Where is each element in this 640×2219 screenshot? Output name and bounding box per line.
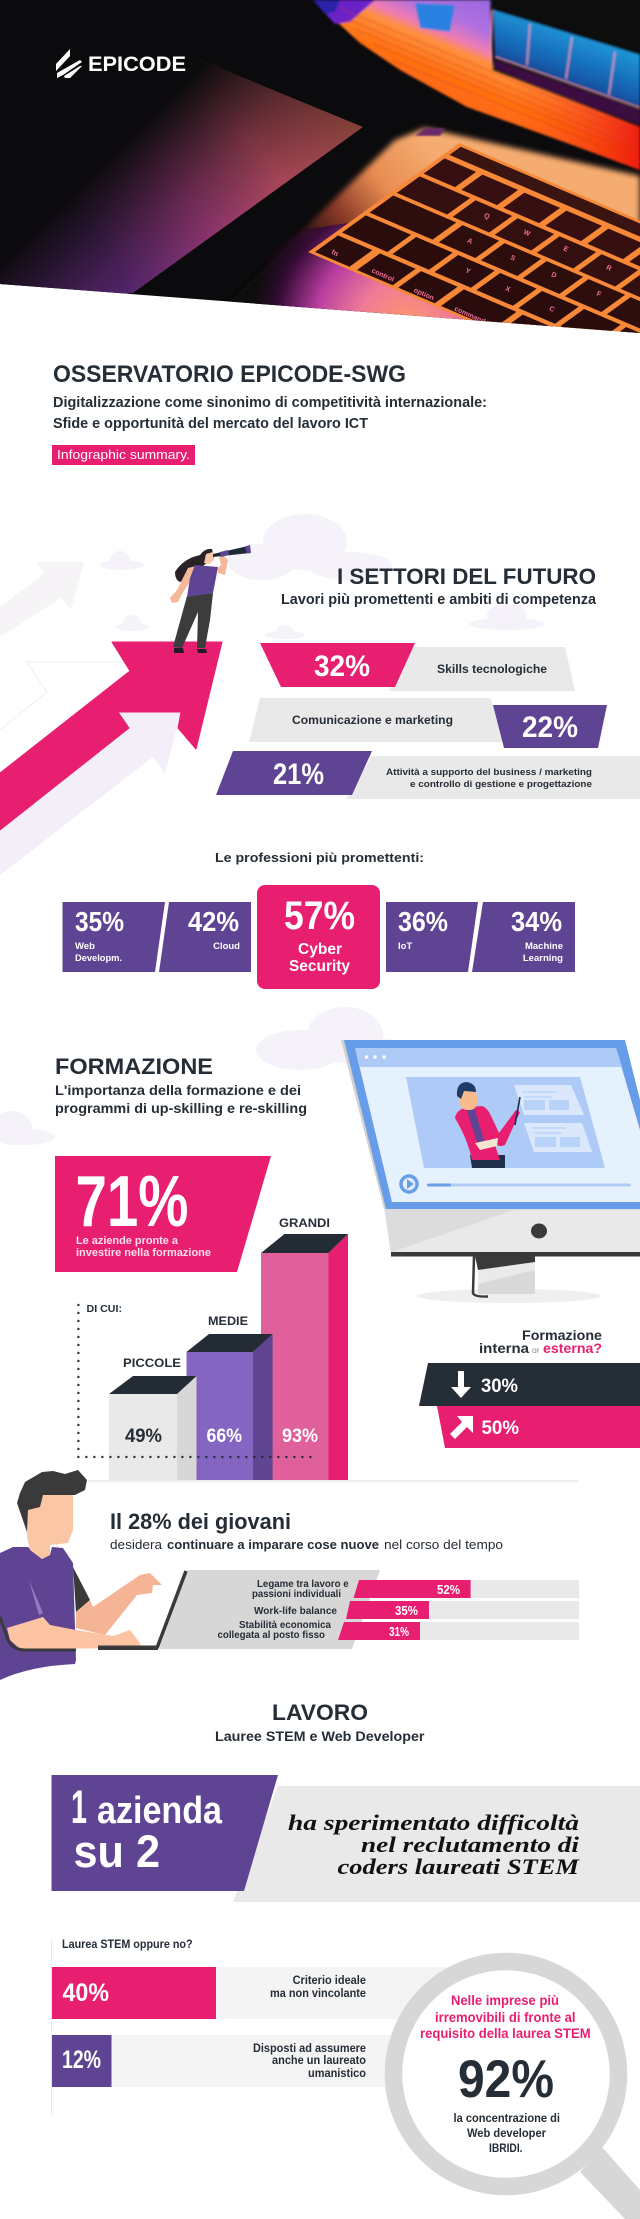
callout: 71%: Le aziende pronte a: [76, 1235, 179, 1247]
title: OSSERVATORIO EPICODE-SWG: [53, 361, 406, 388]
stat: 32% skills tecnologiche: 32%: [314, 650, 370, 683]
background clouds: settori: [100, 514, 545, 639]
bar: disposti ad assumere 12%: umanistico: [308, 2068, 366, 2080]
stat: 21% attività a supporto: Attività a supporto del business / marketing: [386, 767, 592, 778]
magnifying glass: 92%: requisito della laurea STEM: [420, 2026, 591, 2041]
logo: Epicode: EPICODE: [88, 53, 186, 76]
stat: 32% skills tecnologiche: Skills tecnologiche: [437, 664, 547, 676]
bar: grandi 93%: GRANDI: [279, 1216, 330, 1230]
subheading: continuare a imparare: continuare a imparare cose nuove: [167, 1537, 379, 1552]
bar: medie 66%: 66%: [206, 1426, 242, 1447]
hero photo: laptop keyboard: C: [548, 305, 555, 314]
card: cloud 42%: 42%: [188, 906, 239, 937]
pale arrow: [0, 712, 181, 875]
callout: 71%: investire nella formazione: [76, 1247, 211, 1259]
tag: infographic summary: Infographic summary.: [57, 447, 190, 462]
card: machine learning 34%: 34%: [511, 906, 562, 937]
magnifying glass: 92%: Web developer: [467, 2128, 547, 2140]
bar: stabilità economica 31%: 31%: [389, 1625, 409, 1639]
monitor with online lesson: [341, 1040, 640, 1303]
heading: formazione interna or esterna: interna: [479, 1340, 529, 1356]
card: cyber security 57%: [257, 885, 380, 989]
hero photo: laptop keyboard: Q: [483, 212, 491, 221]
subheading: formazione: [55, 1082, 307, 1116]
bar: criterio ideale 40%: Criterio ideale: [293, 1975, 366, 1987]
tag: infographic summary: [52, 445, 195, 465]
callout: 1 azienda su 2: nel reclutamento di: [361, 1832, 580, 1857]
bar: medie 66%: [186, 1314, 273, 1480]
heading: formazione interna or esterna: [479, 1327, 602, 1356]
bar: piccole 49%: 49%: [125, 1426, 162, 1447]
bar: criterio ideale 40%: 40%: [62, 1979, 109, 2007]
hero photo: laptop keyboard: option: [412, 287, 435, 302]
stat: 22% comunicazione e marketing: Comunicazione e marketing: [292, 715, 453, 727]
card: web development 35%: Developm.: [75, 953, 122, 964]
magnifying glass: 92%: IBRIDI.: [489, 2143, 522, 2155]
bar: disposti ad assumere 12%: anche un laureato: [272, 2055, 366, 2067]
bar: stabilità economica 31%: Stabilità economica: [239, 1619, 331, 1631]
hero photo: laptop keyboard: fn: [330, 249, 339, 258]
bar: work-life balance 35%: 35%: [395, 1604, 418, 1618]
stat: esterna 50%: 50%: [482, 1418, 519, 1439]
bar: criterio ideale 40%: [52, 1967, 452, 2019]
callout: 1 azienda su 2: 1: [71, 1780, 87, 1833]
heading: formazione interna or esterna: Formazione: [522, 1327, 602, 1343]
subheading: continuare a imparare: nel corso del tempo: [384, 1537, 503, 1552]
bar: grandi 93%: 93%: [282, 1426, 318, 1447]
bar: piccole 49%: [109, 1356, 196, 1480]
bar: piccole 49%: PICCOLE: [123, 1356, 181, 1370]
stat: 32% skills tecnologiche: [260, 643, 575, 691]
hero photo: laptop keyboard: S: [509, 254, 516, 263]
bar: grandi 93%: [261, 1216, 348, 1480]
subheading: lauree stem: Lauree STEM e Web Developer: [215, 1728, 425, 1744]
stat: 22% comunicazione e marketing: 22%: [522, 711, 578, 744]
hero photo: laptop keyboard: A: [466, 237, 473, 246]
callout: 1 azienda su 2: azienda: [97, 1790, 223, 1832]
woman with telescope: [170, 545, 251, 653]
magnifying glass: 92%: irremovibili di fronte al: [435, 2010, 576, 2025]
magnifying glass: 92%: 92%: [458, 2050, 554, 2109]
stat: 21% attività a supporto: [216, 751, 640, 799]
hero photo: laptop keyboard: command: [453, 306, 486, 326]
callout: 1 azienda su 2: ha sperimentato difficoltà: [288, 1810, 579, 1835]
callout: 1 azienda su 2: coders laureati STEM: [338, 1854, 581, 1879]
subtitle: [53, 394, 487, 432]
heading: i settori del futuro: I SETTORI DEL FUTURO: [337, 564, 596, 589]
subheading: continuare a imparare: [110, 1537, 503, 1552]
heading: i settori del futuro: [281, 564, 597, 608]
outline arrow: [0, 662, 124, 730]
card: cloud 42%: [159, 902, 251, 972]
card: web development 35%: Web: [75, 941, 95, 952]
heading: lavoro: LAVORO: [272, 1700, 368, 1725]
bar: medie 66%: MEDIE: [208, 1314, 248, 1328]
hero photo: laptop keyboard: F: [595, 291, 603, 299]
card: cyber security 57%: Cyber: [298, 941, 342, 958]
bar: work-life balance 35%: [254, 1601, 579, 1619]
heading: il 28% dei giovani: Il 28% dei giovani: [110, 1509, 291, 1534]
hero photo: laptop keyboard: D: [550, 271, 557, 280]
stat: 21% attività a supporto: e controllo di gestione e progettazione: [410, 779, 592, 790]
stat: esterna 50%: [437, 1406, 640, 1448]
bar: stabilità economica 31%: [218, 1619, 579, 1641]
heading: le professioni più promettenti: Le professioni più promettenti:: [215, 850, 424, 865]
magnifying glass: 92%: la concentrazione di: [454, 2113, 560, 2125]
subheading: formazione: L'importanza della formazione e dei: [55, 1082, 301, 1098]
card: machine learning 34%: [472, 902, 575, 972]
card: machine learning 34%: Machine: [525, 941, 563, 952]
stat: interna 30%: [419, 1363, 640, 1406]
callout: 71%: [55, 1156, 271, 1272]
stat: 21% attività a supporto: 21%: [273, 758, 324, 791]
hero photo: laptop keyboard: [0, 0, 640, 333]
magnifying glass: 92%: [394, 1962, 640, 2219]
ghost arrow: [0, 562, 84, 637]
card: iot 36%: 36%: [398, 906, 448, 937]
card: web development 35%: 35%: [75, 906, 124, 937]
bar chart: aziende per dimensione: [109, 1216, 348, 1480]
background clouds: formazione: [0, 1007, 417, 1145]
young man at laptop: [0, 1470, 380, 1680]
bar: legame tra lavoro 52%: 52%: [437, 1583, 460, 1597]
hero photo: laptop keyboard: control: [370, 268, 395, 284]
card: cloud 42%: Cloud: [213, 941, 240, 952]
heading: formazione: FORMAZIONE: [55, 1054, 213, 1079]
hero photo: laptop keyboard: X: [504, 285, 511, 294]
callout: 1 azienda su 2: [52, 1775, 640, 1902]
bar: disposti ad assumere 12%: Disposti ad assumere: [253, 2043, 366, 2055]
stat: interna 30%: 30%: [481, 1376, 518, 1397]
bar: disposti ad assumere 12%: 12%: [62, 2046, 101, 2074]
label: di cui: DI CUI:: [86, 1304, 122, 1315]
hero photo: laptop keyboard: W: [522, 229, 531, 238]
top screen: [313, 0, 640, 170]
hero photo: laptop keyboard: R: [605, 264, 612, 273]
hero photo: laptop keyboard: E: [562, 245, 569, 254]
card: cyber security 57%: 57%: [284, 894, 355, 938]
bar: criterio ideale 40%: ma non vincolante: [270, 1988, 366, 2000]
heading: i settori del futuro: Lavori più promettenti e ambiti di competenza: [281, 592, 597, 608]
magnifying glass: 92%: Nelle imprese più: [451, 1993, 559, 2008]
callout: 71%: 71%: [76, 1162, 188, 1242]
bar: work-life balance 35%: Work-life balance: [254, 1605, 337, 1617]
bar: legame tra lavoro 52%: Legame tra lavoro e: [257, 1578, 349, 1590]
callout: 1 azienda su 2: su 2: [74, 1826, 160, 1877]
subheading: formazione: programmi di up-skilling e re-skilling: [55, 1100, 307, 1116]
bar: disposti ad assumere 12%: [52, 2035, 402, 2087]
stat: 22% comunicazione e marketing: [249, 698, 607, 748]
card: machine learning 34%: Learning: [523, 953, 563, 964]
card: cyber security 57%: Security: [289, 958, 350, 975]
bar: legame tra lavoro 52%: passioni individuali: [252, 1588, 341, 1600]
card: iot 36%: IoT: [398, 941, 412, 952]
heading: formazione interna or esterna: esterna?: [543, 1340, 602, 1356]
logo: Epicode: [56, 49, 186, 78]
card: web development 35%: [62, 902, 165, 972]
card: iot 36%: [386, 902, 478, 972]
bar: stabilità economica 31%: collegata al posto fisso: [218, 1629, 325, 1641]
heading: laurea stem oppure no: Laurea STEM oppure no?: [62, 1939, 193, 1951]
subheading: continuare a imparare: desidera: [110, 1537, 163, 1552]
hero photo: laptop keyboard: Y: [464, 267, 471, 276]
bar: legame tra lavoro 52%: [252, 1578, 579, 1600]
pink rising arrow: [0, 642, 222, 830]
subtitle: Digitalizzazione come sinonimo di competitività internazionale:: [53, 394, 487, 411]
subtitle: Sfide e opportunità del mercato del lavoro ICT: [53, 415, 368, 432]
heading: formazione interna or esterna: or: [532, 1345, 540, 1355]
